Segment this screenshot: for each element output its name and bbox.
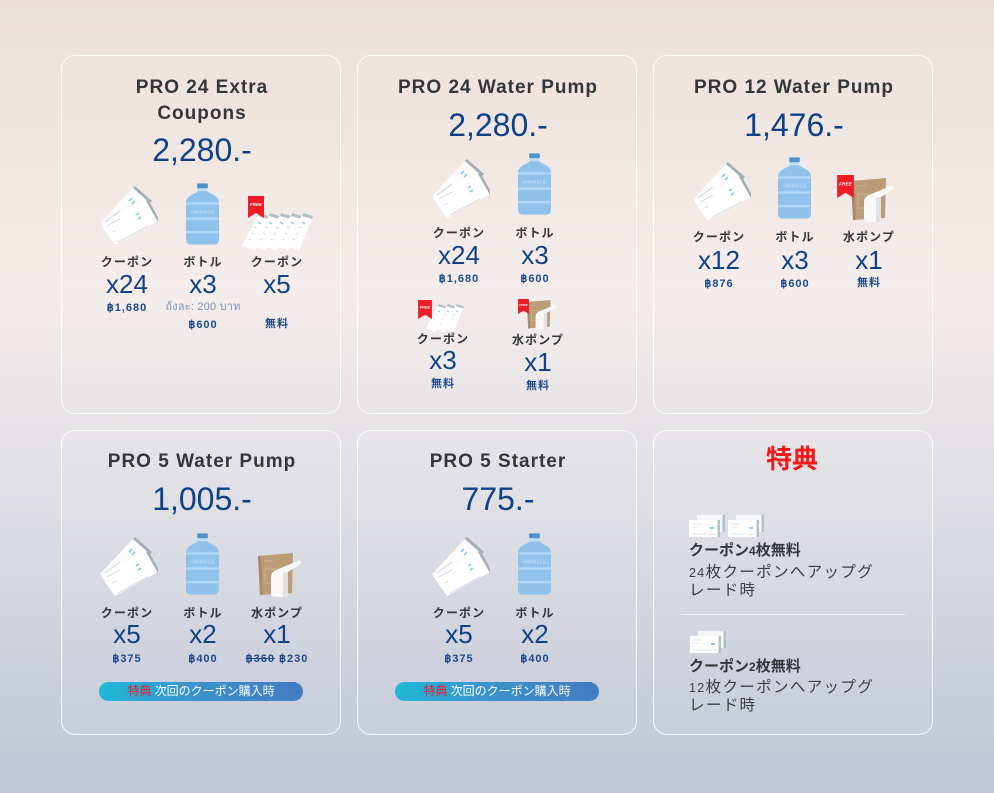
- free coupon value: 無料: [265, 318, 289, 330]
- pump value: 無料: [857, 277, 881, 289]
- price: 2,280.-: [152, 132, 252, 168]
- bottle label: ボトル: [183, 255, 223, 269]
- bottle value: ฿400: [188, 653, 218, 665]
- free coupon value: 無料: [431, 378, 455, 390]
- bottle value: ฿600: [520, 273, 550, 285]
- bottle value: ฿400: [520, 653, 550, 665]
- free coupon label: クーポン: [417, 332, 469, 346]
- coupon value: ฿375: [444, 653, 474, 665]
- panel: PRO 5 Water Pump: [61, 430, 341, 735]
- pump quantity: x1: [524, 347, 552, 377]
- icon: bottle: [186, 183, 219, 245]
- promo pill: [395, 682, 599, 701]
- icon: free coupons: [418, 300, 464, 332]
- free coupon quantity: x5: [263, 269, 291, 299]
- bottle quantity: x2: [521, 619, 549, 649]
- bottle value: ฿600: [780, 278, 810, 290]
- panel: benefits: [653, 430, 933, 735]
- coupon value: ฿1,680: [107, 302, 147, 314]
- coupon label: クーポン: [433, 226, 485, 240]
- bottle quantity: x2: [189, 619, 217, 649]
- pump quantity: x1: [263, 619, 291, 649]
- price: 2,280.-: [448, 107, 548, 143]
- bottle quantity: x3: [781, 245, 809, 275]
- bottle unit note: ถังละ: 200 บาท: [165, 301, 241, 313]
- bottle quantity: x3: [521, 240, 549, 270]
- coupon quantity: x24: [438, 240, 480, 270]
- heading: PRO 5 Starter: [430, 451, 566, 472]
- panel: PRO 12 Water Pump: [653, 55, 933, 414]
- promo pill: 特典 次回のクーポン購入時: [423, 684, 571, 698]
- coupon label: クーポン: [101, 255, 153, 269]
- coupon quantity: x5: [445, 619, 473, 649]
- coupon label: クーポン: [433, 606, 485, 620]
- promo pill: [99, 682, 303, 701]
- bottle label: ボトル: [183, 606, 223, 620]
- heading: PRO 24 Water Pump: [398, 77, 598, 98]
- panel: PRO 5 Starter: [357, 430, 637, 735]
- heading: PRO 5 Water Pump: [108, 451, 296, 472]
- icon: coupons: [432, 159, 490, 218]
- coupon quantity: x24: [106, 269, 148, 299]
- free coupon quantity: x3: [429, 345, 457, 375]
- pump value: 無料: [526, 380, 550, 392]
- promo pill: 特典 次回のクーポン購入時: [127, 684, 275, 698]
- panel: PRO 24 Extra Coupons: [61, 55, 341, 414]
- icon: free pump: [518, 299, 556, 330]
- pump label: 水ポンプ: [843, 230, 895, 244]
- price: 775.-: [462, 481, 534, 517]
- pump label: 水ポンプ: [512, 333, 564, 347]
- price: 1,005.-: [152, 481, 252, 517]
- bottle quantity: x3: [189, 269, 217, 299]
- icon: coupons: [432, 537, 490, 596]
- heading: benefits: 特典: [766, 444, 818, 474]
- benefit 2 description: レード時: [689, 697, 756, 714]
- divider: [681, 614, 905, 615]
- icon: bottle: [518, 153, 551, 215]
- bottle label: ボトル: [775, 230, 815, 244]
- coupon value: ฿1,680: [439, 273, 479, 285]
- coupon quantity: x12: [698, 245, 740, 275]
- icon: coupons: [100, 537, 158, 596]
- coupon value: ฿375: [112, 653, 142, 665]
- icon: two coupons: [690, 631, 726, 653]
- benefit 1 title: クーポン4枚無料: [689, 542, 801, 559]
- icon: coupons: [100, 186, 158, 245]
- price: 1,476.-: [744, 107, 844, 143]
- pump value: ฿360 ฿230: [246, 653, 308, 665]
- icon: coupons: [693, 162, 751, 221]
- coupon label: クーポン: [101, 606, 153, 620]
- benefit 2 title: クーポン2枚無料: [689, 658, 801, 675]
- coupon label: クーポン: [693, 230, 745, 244]
- icon: bottle: [186, 533, 219, 595]
- pump quantity: x1: [855, 245, 883, 275]
- icon: bottle: [778, 157, 811, 219]
- bottle label: ボトル: [515, 606, 555, 620]
- pump label: 水ポンプ: [251, 606, 303, 620]
- heading: PRO 12 Water Pump: [694, 77, 894, 98]
- bottle label: ボトル: [515, 226, 555, 240]
- coupon value: ฿876: [704, 278, 734, 290]
- benefit 1 description: [689, 564, 874, 599]
- benefit 2 description: [689, 678, 874, 714]
- icon: free pump: [837, 175, 894, 222]
- free coupon label: クーポン: [251, 255, 303, 269]
- heading: Coupons: [157, 103, 247, 124]
- heading: PRO 24 Extra: [136, 77, 268, 98]
- benefit 2 description: 12枚クーポンへアップグ: [689, 679, 874, 696]
- coupon quantity: x5: [113, 619, 141, 649]
- heading: [136, 77, 268, 124]
- icon: four coupons: [689, 515, 764, 537]
- icon: free coupons: [242, 196, 313, 251]
- icon: pump: [258, 553, 301, 597]
- benefit 1 description: レード時: [689, 582, 756, 599]
- benefit 1 description: 24枚クーポンへアップグ: [689, 564, 874, 581]
- panel: PRO 24 Water Pump: [357, 55, 637, 414]
- icon: bottle: [518, 533, 551, 595]
- bottle value: ฿600: [188, 319, 218, 331]
